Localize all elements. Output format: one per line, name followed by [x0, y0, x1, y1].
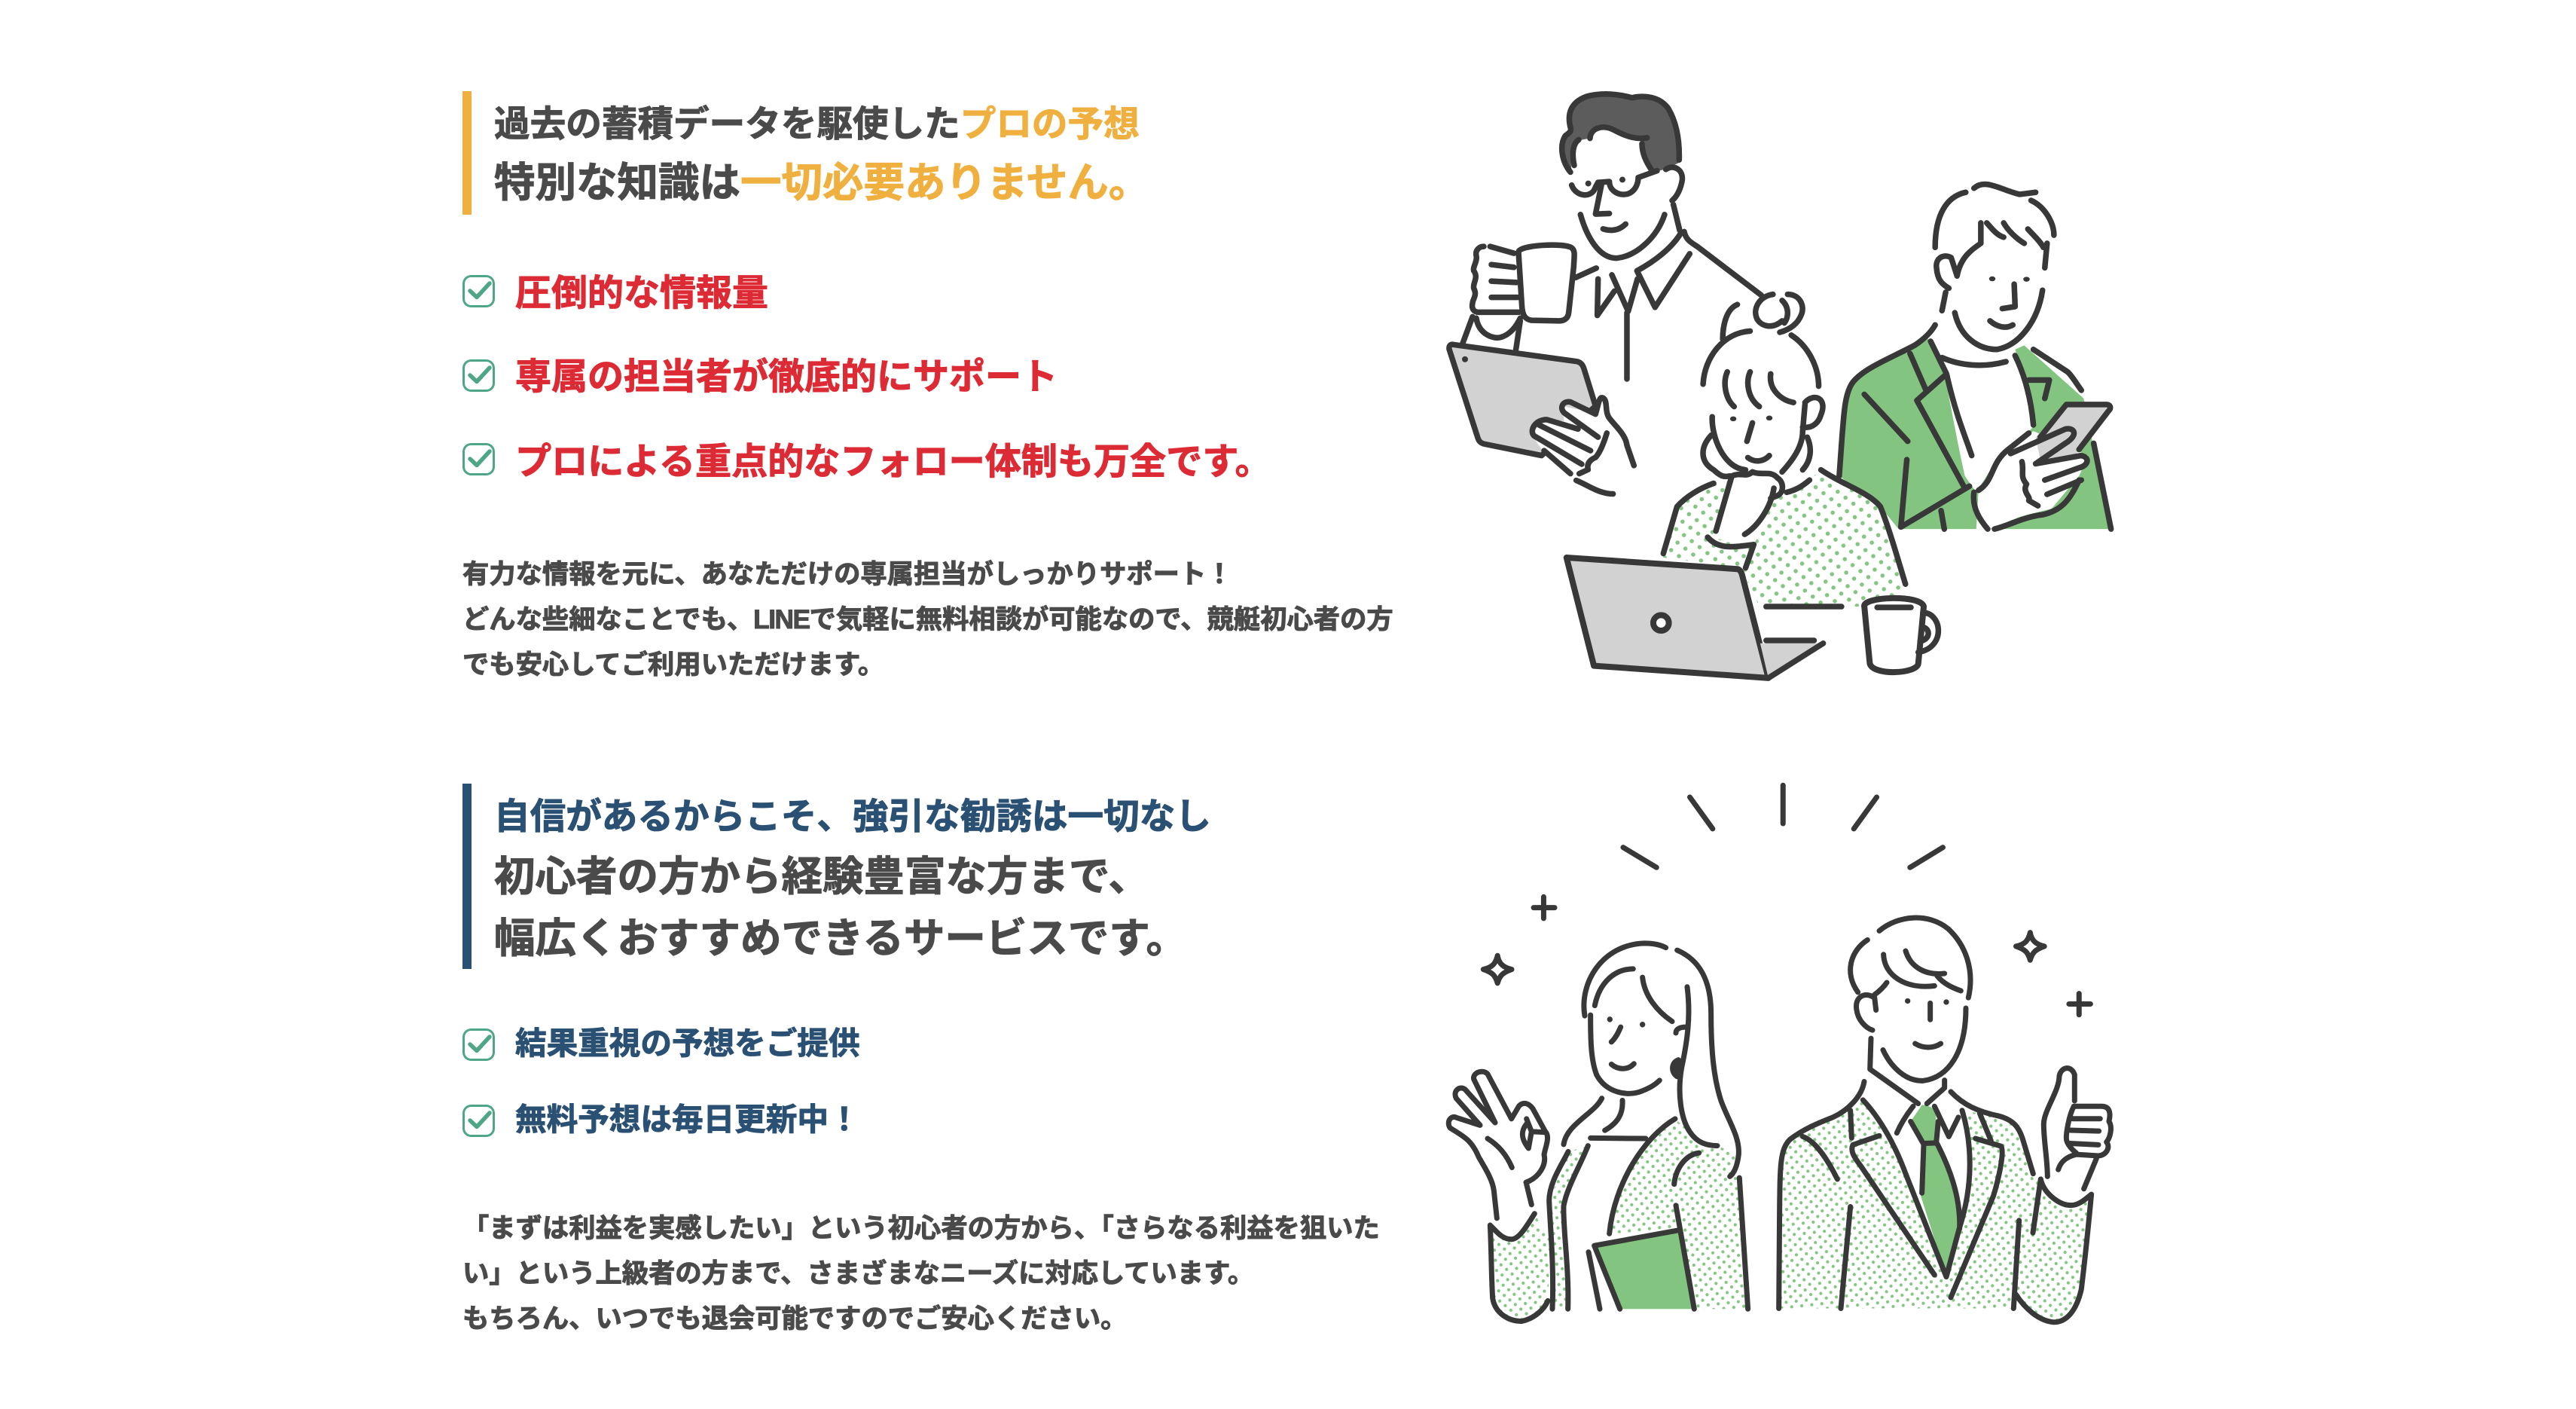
heading: no pushy sales: 幅広くおすすめできるサービスです。	[494, 915, 1187, 961]
checklist: red features: プロによる重点的なフォロー体制も万全です。	[515, 442, 1271, 482]
figure: woman thinking at laptop with mug	[1567, 295, 1938, 678]
checklist: red features: 専属の担当者が徹底的にサポート	[515, 357, 1058, 397]
panel: no pushy sales	[462, 784, 1380, 1334]
figure: man with glasses, mug and tablet	[1449, 94, 1761, 494]
heading: professional predictions: 過去の蓄積データを駆使したプロの予想	[494, 105, 1140, 145]
panel: professional predictions	[462, 91, 1393, 680]
checklist: blue features	[462, 1025, 860, 1137]
heading: professional predictions	[462, 91, 1149, 215]
body text: for all levels: い」という上級者の方まで、さまざまなニーズに対応しています。	[462, 1259, 1254, 1288]
heading: no pushy sales	[462, 784, 1211, 969]
checklist: red features: 圧倒的な情報量	[515, 274, 768, 313]
body text: for all levels	[462, 1213, 1380, 1334]
body text: dedicated support: どんな些細なことでも、LINEで気軽に無料相談が可能なので、競艇初心者の方	[462, 605, 1393, 634]
figure: man in suit giving thumbs up	[1779, 918, 2111, 1322]
body text: for all levels: 「まずは利益を実感したい」という初心者の方から、「さらなる利益を狙いた	[462, 1214, 1380, 1243]
heading: no pushy sales: 自信があるからこそ、強引な勧誘は一切なし	[494, 797, 1211, 837]
heading: no pushy sales: 初心者の方から経験豊富な方まで、	[494, 854, 1149, 900]
heading: professional predictions: 特別な知識は一切必要ありません。	[494, 160, 1149, 206]
checklist: blue features: 無料予想は毎日更新中！	[515, 1102, 860, 1137]
figure: woman with OK sign and folder	[1448, 943, 1748, 1322]
body text: dedicated support: でも安心してご利用いただけます。	[462, 650, 884, 680]
checklist: blue features: 結果重視の予想をご提供	[515, 1025, 860, 1061]
illustration: two confident businesspeople	[1446, 782, 2114, 1325]
illustration: three colleagues working	[1446, 91, 2114, 681]
checklist: red features	[462, 274, 1271, 482]
body text: for all levels: もちろん、いつでも退会可能ですのでご安心ください。	[462, 1304, 1127, 1334]
body text: dedicated support	[462, 559, 1393, 680]
emphasis rays and sparkles	[1483, 785, 2090, 1015]
body text: dedicated support: 有力な情報を元に、あなただけの専属担当がしっかりサポート！	[462, 560, 1233, 589]
figure: man with green jacket and phone	[1839, 185, 2111, 529]
